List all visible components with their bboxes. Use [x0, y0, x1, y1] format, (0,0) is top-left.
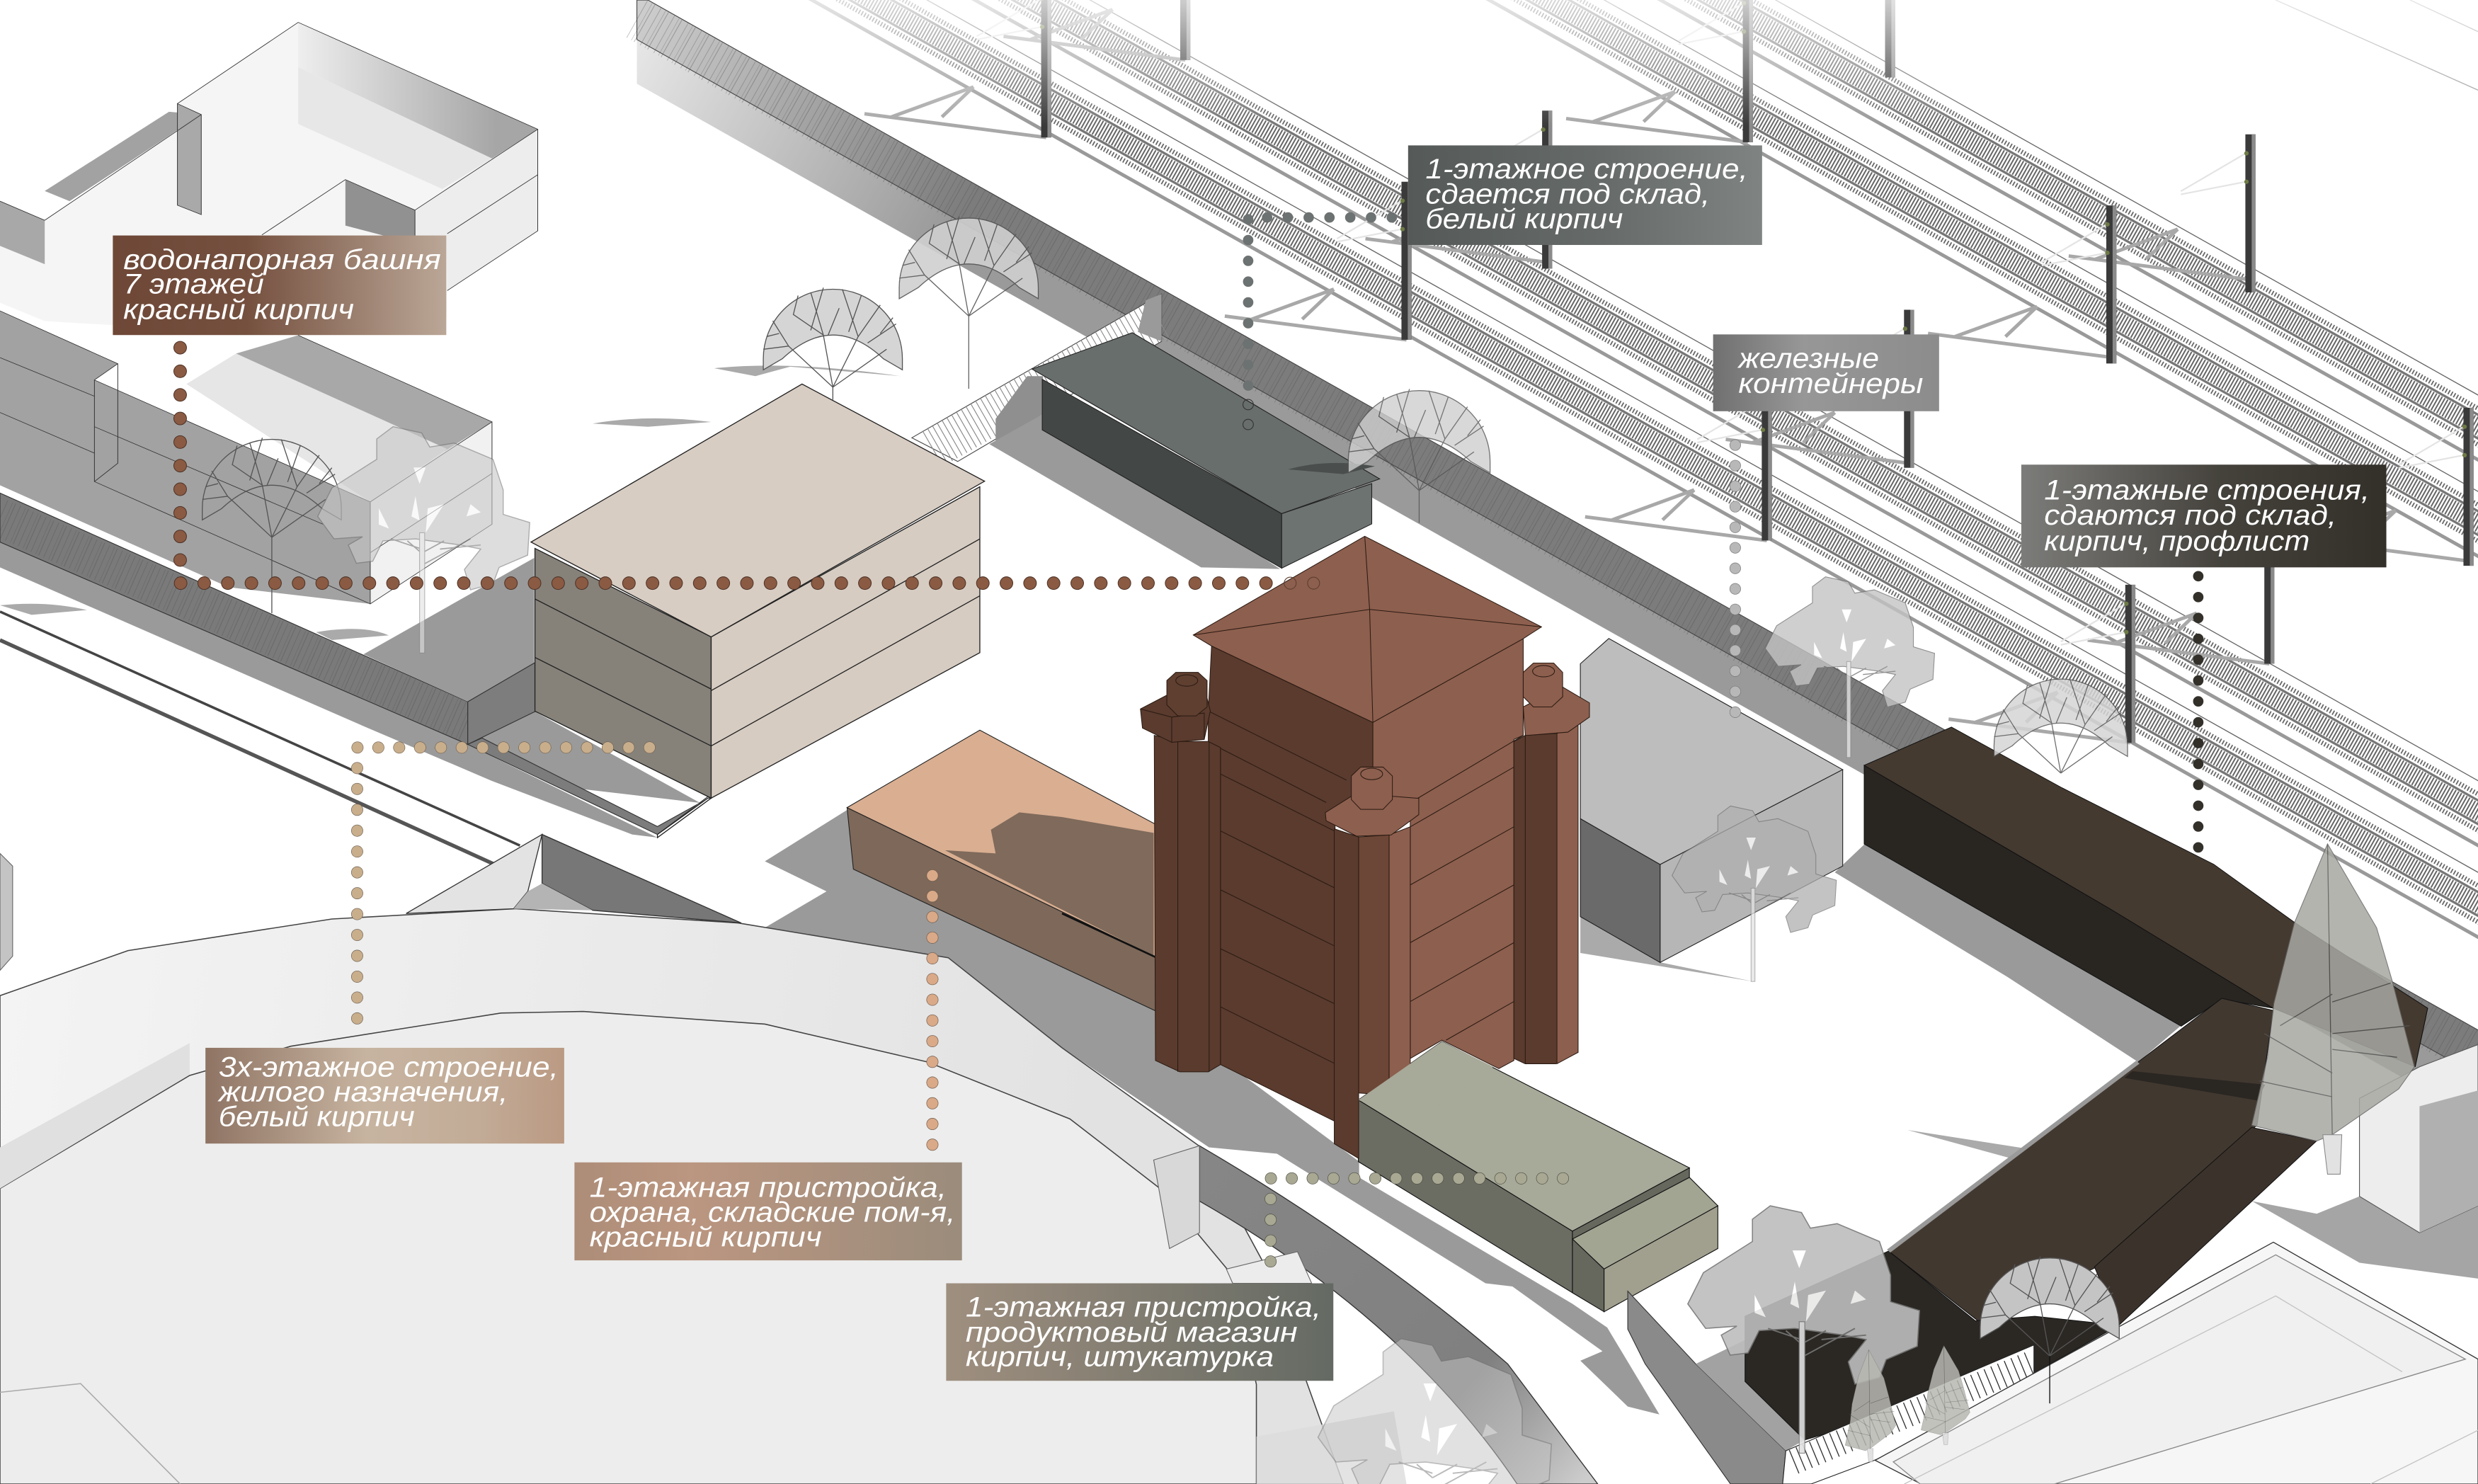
umbrella tree at block B	[202, 438, 341, 613]
hollow leader ends: green building	[1243, 399, 1253, 430]
label: dark one-storey buildings: 1-этажные строения,	[2044, 474, 2370, 506]
leaf tree near container building top	[1765, 577, 1934, 758]
label: water tower	[113, 236, 446, 335]
label: peach annex	[574, 1163, 962, 1260]
curved hatched strip	[1153, 1146, 1598, 1484]
shadow of container building	[1580, 917, 1752, 981]
lower wing side	[2094, 1127, 2317, 1325]
dotted leader: one-storey dark buildings	[2196, 576, 2200, 849]
right pier	[1514, 725, 1578, 1063]
umbrella tree at green building	[1348, 389, 1490, 523]
hatched link at beige building	[468, 662, 708, 835]
dotted leader: three-storey building	[357, 748, 649, 1037]
lower left retaining wall and shadow	[0, 493, 658, 864]
label: containers: контейнеры	[1738, 367, 1924, 399]
lower wing roof	[1889, 998, 2273, 1323]
top wing wall	[1864, 765, 2273, 1026]
beige three-storey building	[531, 384, 985, 838]
central pier	[1335, 829, 1359, 1158]
shadow of green building	[989, 414, 1280, 569]
label: peach annex: 1-этажная пристройка,	[590, 1172, 947, 1204]
catenary poles	[976, 0, 2474, 743]
label: containers: железные	[1737, 342, 1879, 374]
label: three-storey building	[205, 1048, 564, 1143]
left capital	[1141, 695, 1211, 742]
thin site lines top right	[2276, 0, 2478, 90]
label: three-storey building: жилого назначения,	[217, 1075, 508, 1107]
umbrella tree by wall	[899, 217, 1039, 389]
big conifer	[2251, 844, 2414, 1174]
dotted leader: olive annex	[1271, 1178, 1563, 1274]
label: water tower: красный кирпич	[123, 293, 354, 325]
label: containers	[1713, 334, 1939, 411]
leaf tree on container building	[1672, 806, 1837, 981]
small leaf-tree shadows	[0, 365, 2038, 1162]
right capital	[1523, 687, 1589, 736]
olive one-storey annex	[1359, 1041, 1718, 1312]
tower left face lines	[1209, 711, 1347, 1063]
tower right face lines	[1410, 736, 1523, 1040]
small conifer left	[1845, 1349, 1896, 1462]
building B: grey translucent block left	[0, 311, 492, 604]
tower right mass	[1373, 639, 1523, 1068]
dotted leader: water tower	[180, 348, 1272, 583]
hatched white strip bottom	[1783, 1345, 2034, 1484]
shadow of dark L-building	[1835, 844, 2181, 1062]
dotted leader: green building	[1248, 217, 1392, 389]
hatched wall below olive annex	[1628, 1291, 1805, 1484]
bottom right white building	[1875, 1242, 2478, 1484]
right edge white building and shadow	[2252, 1044, 2478, 1279]
label: peach annex: охрана, складские пом-я,	[590, 1196, 955, 1228]
label: green building	[1408, 145, 1762, 245]
label: olive annex: 1-этажная пристройка,	[966, 1291, 1321, 1323]
top wing roof	[1864, 727, 2428, 1067]
dark L-shaped one-storey buildings	[1745, 727, 2428, 1440]
umbrella tree at rails	[1994, 678, 2128, 773]
upper retaining wall and shadow	[637, 0, 2478, 1166]
label: peach annex: красный кирпич	[590, 1221, 822, 1253]
label: olive annex	[946, 1284, 1333, 1381]
grey steel containers building	[1580, 639, 1843, 962]
central capital	[1325, 797, 1419, 836]
label: dark one-storey buildings	[2021, 464, 2387, 567]
shadow big of tower and peach wing	[765, 806, 1660, 1415]
peach one-storey annex	[847, 730, 1157, 1012]
ramp between wall sections	[912, 294, 1162, 462]
olive annex overlay beside pier	[1359, 1041, 1493, 1122]
hatched roof wedge	[406, 835, 741, 923]
leaf tree bottom centre	[1318, 1339, 1551, 1484]
label: three-storey building: 3х-этажное строение,	[219, 1051, 559, 1083]
umbrella tree near beige building	[763, 287, 903, 400]
left edge block	[0, 853, 13, 971]
label: olive annex: кирпич, штукатурка	[966, 1341, 1274, 1373]
label: dark one-storey buildings: сдаются под склад,	[2044, 499, 2336, 531]
shadow of beige building	[363, 558, 700, 803]
label: three-storey building: белый кирпич	[219, 1100, 415, 1132]
tower roof	[1193, 536, 1541, 722]
leaf tree on block B	[318, 427, 530, 653]
pole shadows	[864, 9, 2469, 743]
umbrella tree on L-building	[1980, 1257, 2119, 1403]
fade of tracks at top	[664, 0, 2478, 127]
label: water tower: 7 этажей	[123, 268, 264, 300]
tower left mass	[1209, 646, 1373, 1121]
dark green one-storey building	[1032, 333, 1380, 568]
label: dark one-storey buildings: кирпич, профлист	[2044, 525, 2309, 557]
hollow leader ends: water tower	[1284, 577, 1320, 589]
small conifer right	[1921, 1345, 1970, 1444]
label: green building: 1-этажное строение,	[1425, 153, 1748, 185]
lower block	[1745, 1251, 2119, 1440]
label: water tower: водонапорная башня	[123, 244, 441, 275]
dotted leader: peach annex	[930, 876, 935, 1148]
railway tracks	[553, 0, 2478, 983]
label: green building: белый кирпич	[1425, 203, 1623, 235]
building A: translucent upper left	[0, 23, 538, 325]
leaf tree bottom left of L	[1688, 1206, 1919, 1453]
left pier	[1154, 736, 1221, 1072]
water tower	[1141, 536, 1589, 1158]
curved large building (bottom left)	[0, 908, 1343, 1484]
label: olive annex: продуктовый магазин	[966, 1316, 1298, 1348]
label: green building: сдается под склад,	[1425, 178, 1710, 210]
dotted leader: containers	[1732, 445, 1737, 721]
